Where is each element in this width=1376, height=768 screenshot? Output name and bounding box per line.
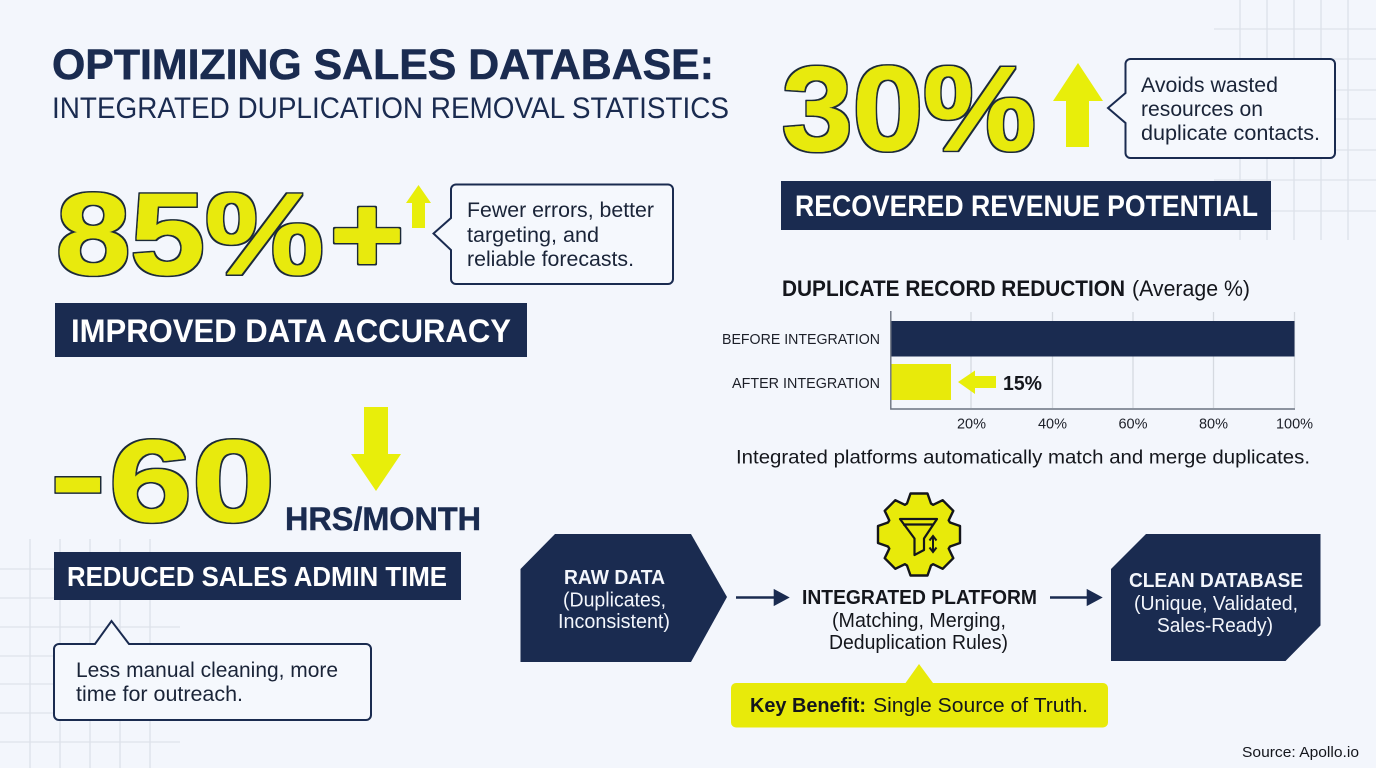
callout: key benefit (731, 664, 1108, 728)
callout: key benefit: Single Source of Truth. (873, 695, 1088, 717)
icon: left arrow to bar (958, 370, 996, 394)
flow step: raw data: RAW DATA (564, 567, 665, 589)
banner: recovered revenue potential (781, 181, 1271, 230)
axis tick labels (957, 416, 1313, 432)
arrow: platform to clean (1050, 591, 1100, 604)
chart title: DUPLICATE RECORD REDUCTION (782, 276, 1125, 301)
flow step: integrated platform (802, 587, 1037, 654)
big number: -60: 60 (109, 416, 275, 546)
banner: recovered revenue potential: RECOVERED REVENUE POTENTIAL (795, 190, 1258, 223)
callout: less manual cleaning: Less manual cleaning, more (76, 659, 338, 682)
row labels: AFTER INTEGRATION (732, 376, 880, 392)
source note: Source: Apollo.io (1242, 744, 1359, 761)
banner: improved data accuracy (55, 303, 527, 357)
callout: avoids wasted resources (1108, 59, 1335, 158)
title: INTEGRATED DUPLICATION REMOVAL STATISTICS (52, 92, 729, 125)
flow step: integrated platform: (Matching, Merging, (832, 610, 1006, 632)
stat: -60 hrs/month (50, 407, 481, 720)
big number: 85%+: + (331, 176, 403, 294)
bar: after integration (891, 364, 951, 400)
axis tick labels: 60% (1118, 416, 1148, 432)
callout: fewer errors (434, 184, 673, 284)
flow step: integrated platform: Deduplication Rules) (829, 632, 1008, 654)
banner: reduced sales admin time: REDUCED SALES ADMIN TIME (67, 561, 447, 592)
flow step: clean database: CLEAN DATABASE (1129, 570, 1303, 592)
axis tick labels: 40% (1038, 416, 1067, 432)
flow step: clean database: (Unique, Validated, (1134, 593, 1298, 615)
flow step: raw data (520, 534, 727, 662)
callout: avoids wasted resources: resources on (1141, 98, 1263, 121)
value label 15%: 15% (1003, 372, 1042, 395)
big number: -60 (50, 410, 275, 546)
title: OPTIMIZING SALES DATABASE: (52, 41, 714, 89)
flow step: raw data: Inconsistent) (558, 611, 670, 633)
axis tick labels: 20% (957, 416, 986, 432)
callout: fewer errors: reliable forecasts. (467, 248, 634, 271)
title (52, 41, 729, 125)
flow step: clean database: Sales-Ready) (1157, 615, 1273, 637)
icon: large up arrow (1053, 63, 1103, 147)
stat: 85% improved data accuracy (55, 169, 673, 357)
flow step: integrated platform: INTEGRATED PLATFORM (802, 587, 1037, 609)
icon: small up arrow (406, 185, 431, 228)
axis tick labels: 100% (1276, 416, 1313, 432)
bar: before integration (891, 321, 1294, 356)
callout: avoids wasted resources: duplicate contacts. (1141, 122, 1320, 145)
process flow (520, 494, 1320, 728)
unit: hrs/month: HRS/MONTH (285, 501, 481, 537)
icon: down arrow (351, 407, 401, 491)
chart: duplicate record reduction (722, 276, 1313, 468)
chart title: (Average %) (1132, 276, 1250, 301)
row labels: BEFORE INTEGRATION (722, 332, 880, 348)
callout: key benefit: Key Benefit: (750, 695, 866, 717)
callout: fewer errors: targeting, and (467, 224, 599, 247)
banner: improved data accuracy: IMPROVED DATA ACCURACY (71, 313, 511, 349)
callout: less manual cleaning (54, 621, 371, 720)
big number: 85%+: 85% (56, 169, 324, 299)
chart axes (891, 311, 1295, 409)
icon: gear with funnel (878, 494, 960, 576)
flow step: clean database (1111, 534, 1320, 661)
stat: 30% recovered revenue (781, 42, 1335, 230)
row labels (722, 332, 880, 392)
chart caption: Integrated platforms automatically match and merge duplicates. (736, 446, 1310, 468)
callout: fewer errors: Fewer errors, better (467, 199, 654, 222)
big number: 30%: 30% (782, 42, 1036, 176)
banner: reduced sales admin time (54, 552, 461, 600)
callout: avoids wasted resources: Avoids wasted (1141, 74, 1278, 97)
flow step: raw data: (Duplicates, (563, 590, 666, 612)
callout: less manual cleaning: time for outreach. (76, 683, 243, 706)
axis tick labels: 80% (1199, 416, 1228, 432)
arrow: raw to platform (736, 591, 787, 604)
big number: -60: - (50, 410, 106, 540)
big number: 85%+ (56, 169, 403, 299)
